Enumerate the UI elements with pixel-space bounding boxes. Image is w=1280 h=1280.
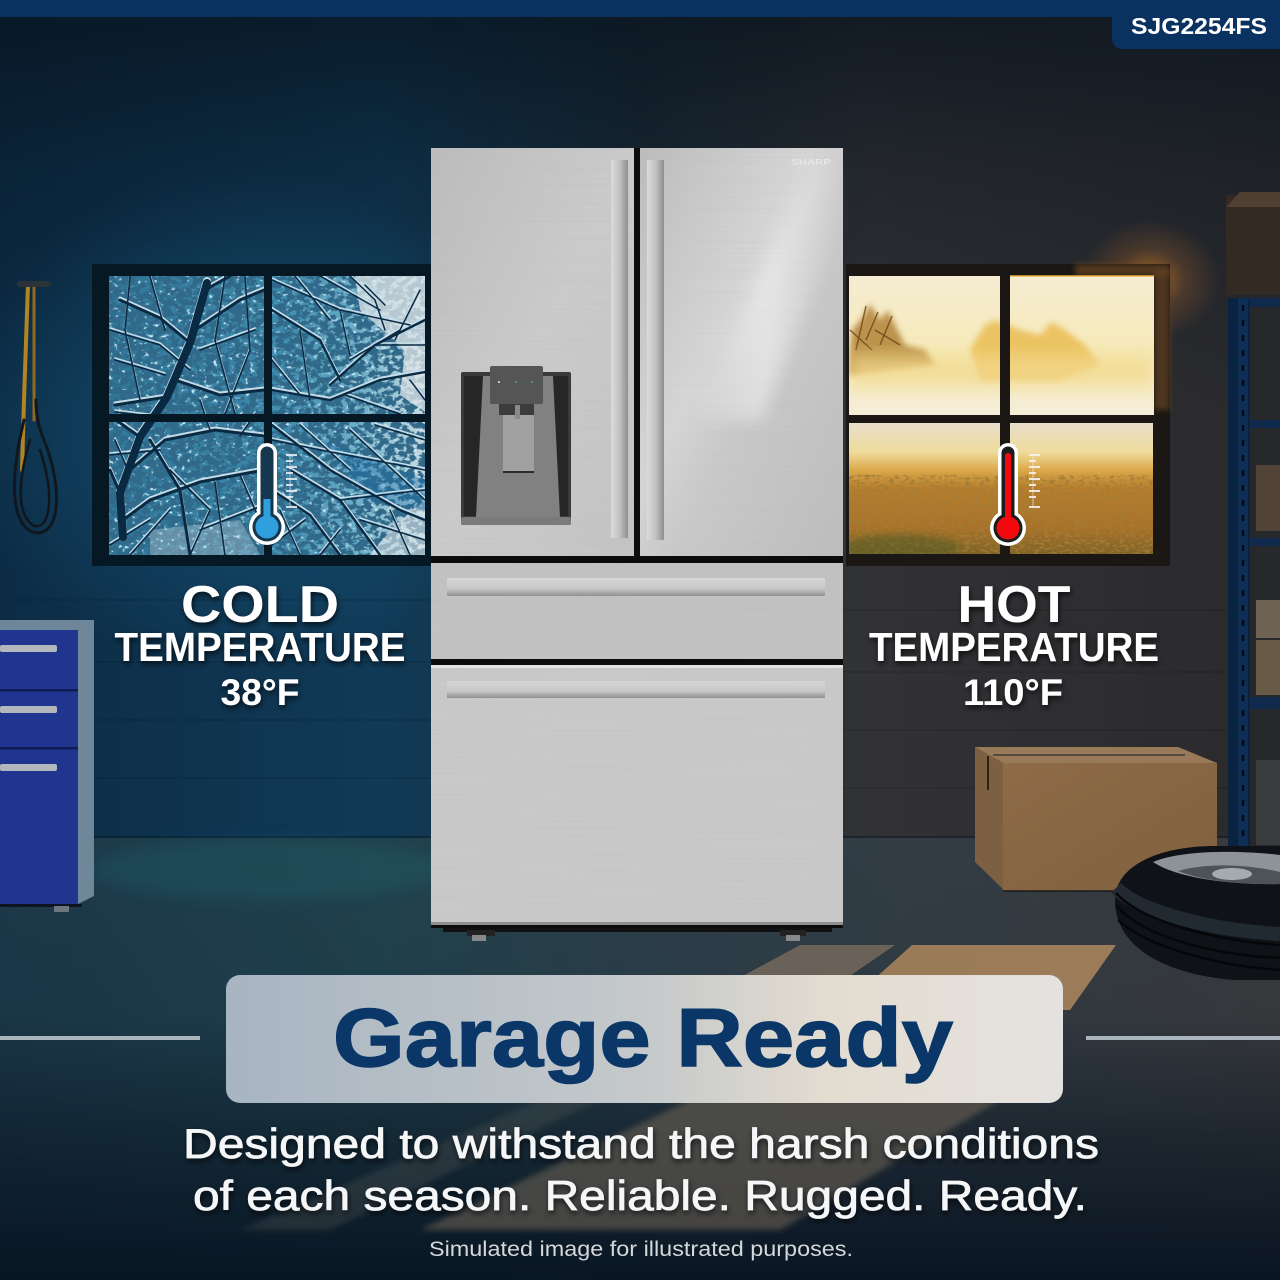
cold temperature label: COLD	[181, 576, 339, 634]
title panel	[226, 975, 1063, 1103]
cold temperature label: TEMPERATURE	[114, 624, 406, 670]
description: Designed to withstand the harsh conditions	[183, 1120, 1099, 1167]
model number tag	[1112, 0, 1280, 49]
top navy bar	[0, 0, 1280, 17]
decorative divider lines	[0, 1036, 1280, 1040]
model number tag: SJG2254FS	[1131, 13, 1267, 39]
hose on wall	[14, 284, 57, 533]
hot temperature label	[869, 576, 1159, 713]
description	[183, 1120, 1099, 1219]
footnote: Simulated image for illustrated purposes.	[429, 1238, 853, 1261]
cold window	[92, 264, 432, 566]
hot temperature label: HOT	[958, 576, 1071, 634]
lower drawer	[431, 665, 843, 925]
cold thermometer icon	[249, 443, 297, 545]
refrigerator	[431, 148, 843, 941]
door handles	[611, 160, 664, 540]
title: Garage Ready	[333, 991, 953, 1084]
drawer handles	[447, 578, 825, 698]
upper drawer	[431, 563, 843, 659]
water and ice dispenser	[461, 366, 571, 525]
sunlight on floor	[240, 945, 1116, 1230]
hot thermometer icon	[990, 443, 1040, 546]
hot window	[840, 220, 1220, 566]
brand logo: SHARP	[791, 157, 831, 167]
left door	[431, 148, 634, 556]
garage wall	[0, 0, 1280, 840]
right door	[640, 148, 843, 556]
hot temperature label: 110°F	[963, 672, 1063, 713]
metal shelving with boxes	[1226, 192, 1280, 850]
cold temperature label	[114, 576, 406, 713]
hot temperature label: TEMPERATURE	[869, 624, 1159, 670]
blue tool cabinet	[0, 620, 94, 912]
description: of each season. Reliable. Rugged. Ready.	[193, 1172, 1087, 1219]
sunrise field scene	[840, 276, 1154, 562]
cold temperature label: 38°F	[220, 672, 300, 713]
tire with rim	[1115, 846, 1280, 980]
fridge base and feet	[443, 924, 832, 941]
garage floor	[0, 838, 1280, 1280]
snowy tree scene	[109, 274, 425, 555]
cardboard box	[975, 747, 1217, 891]
